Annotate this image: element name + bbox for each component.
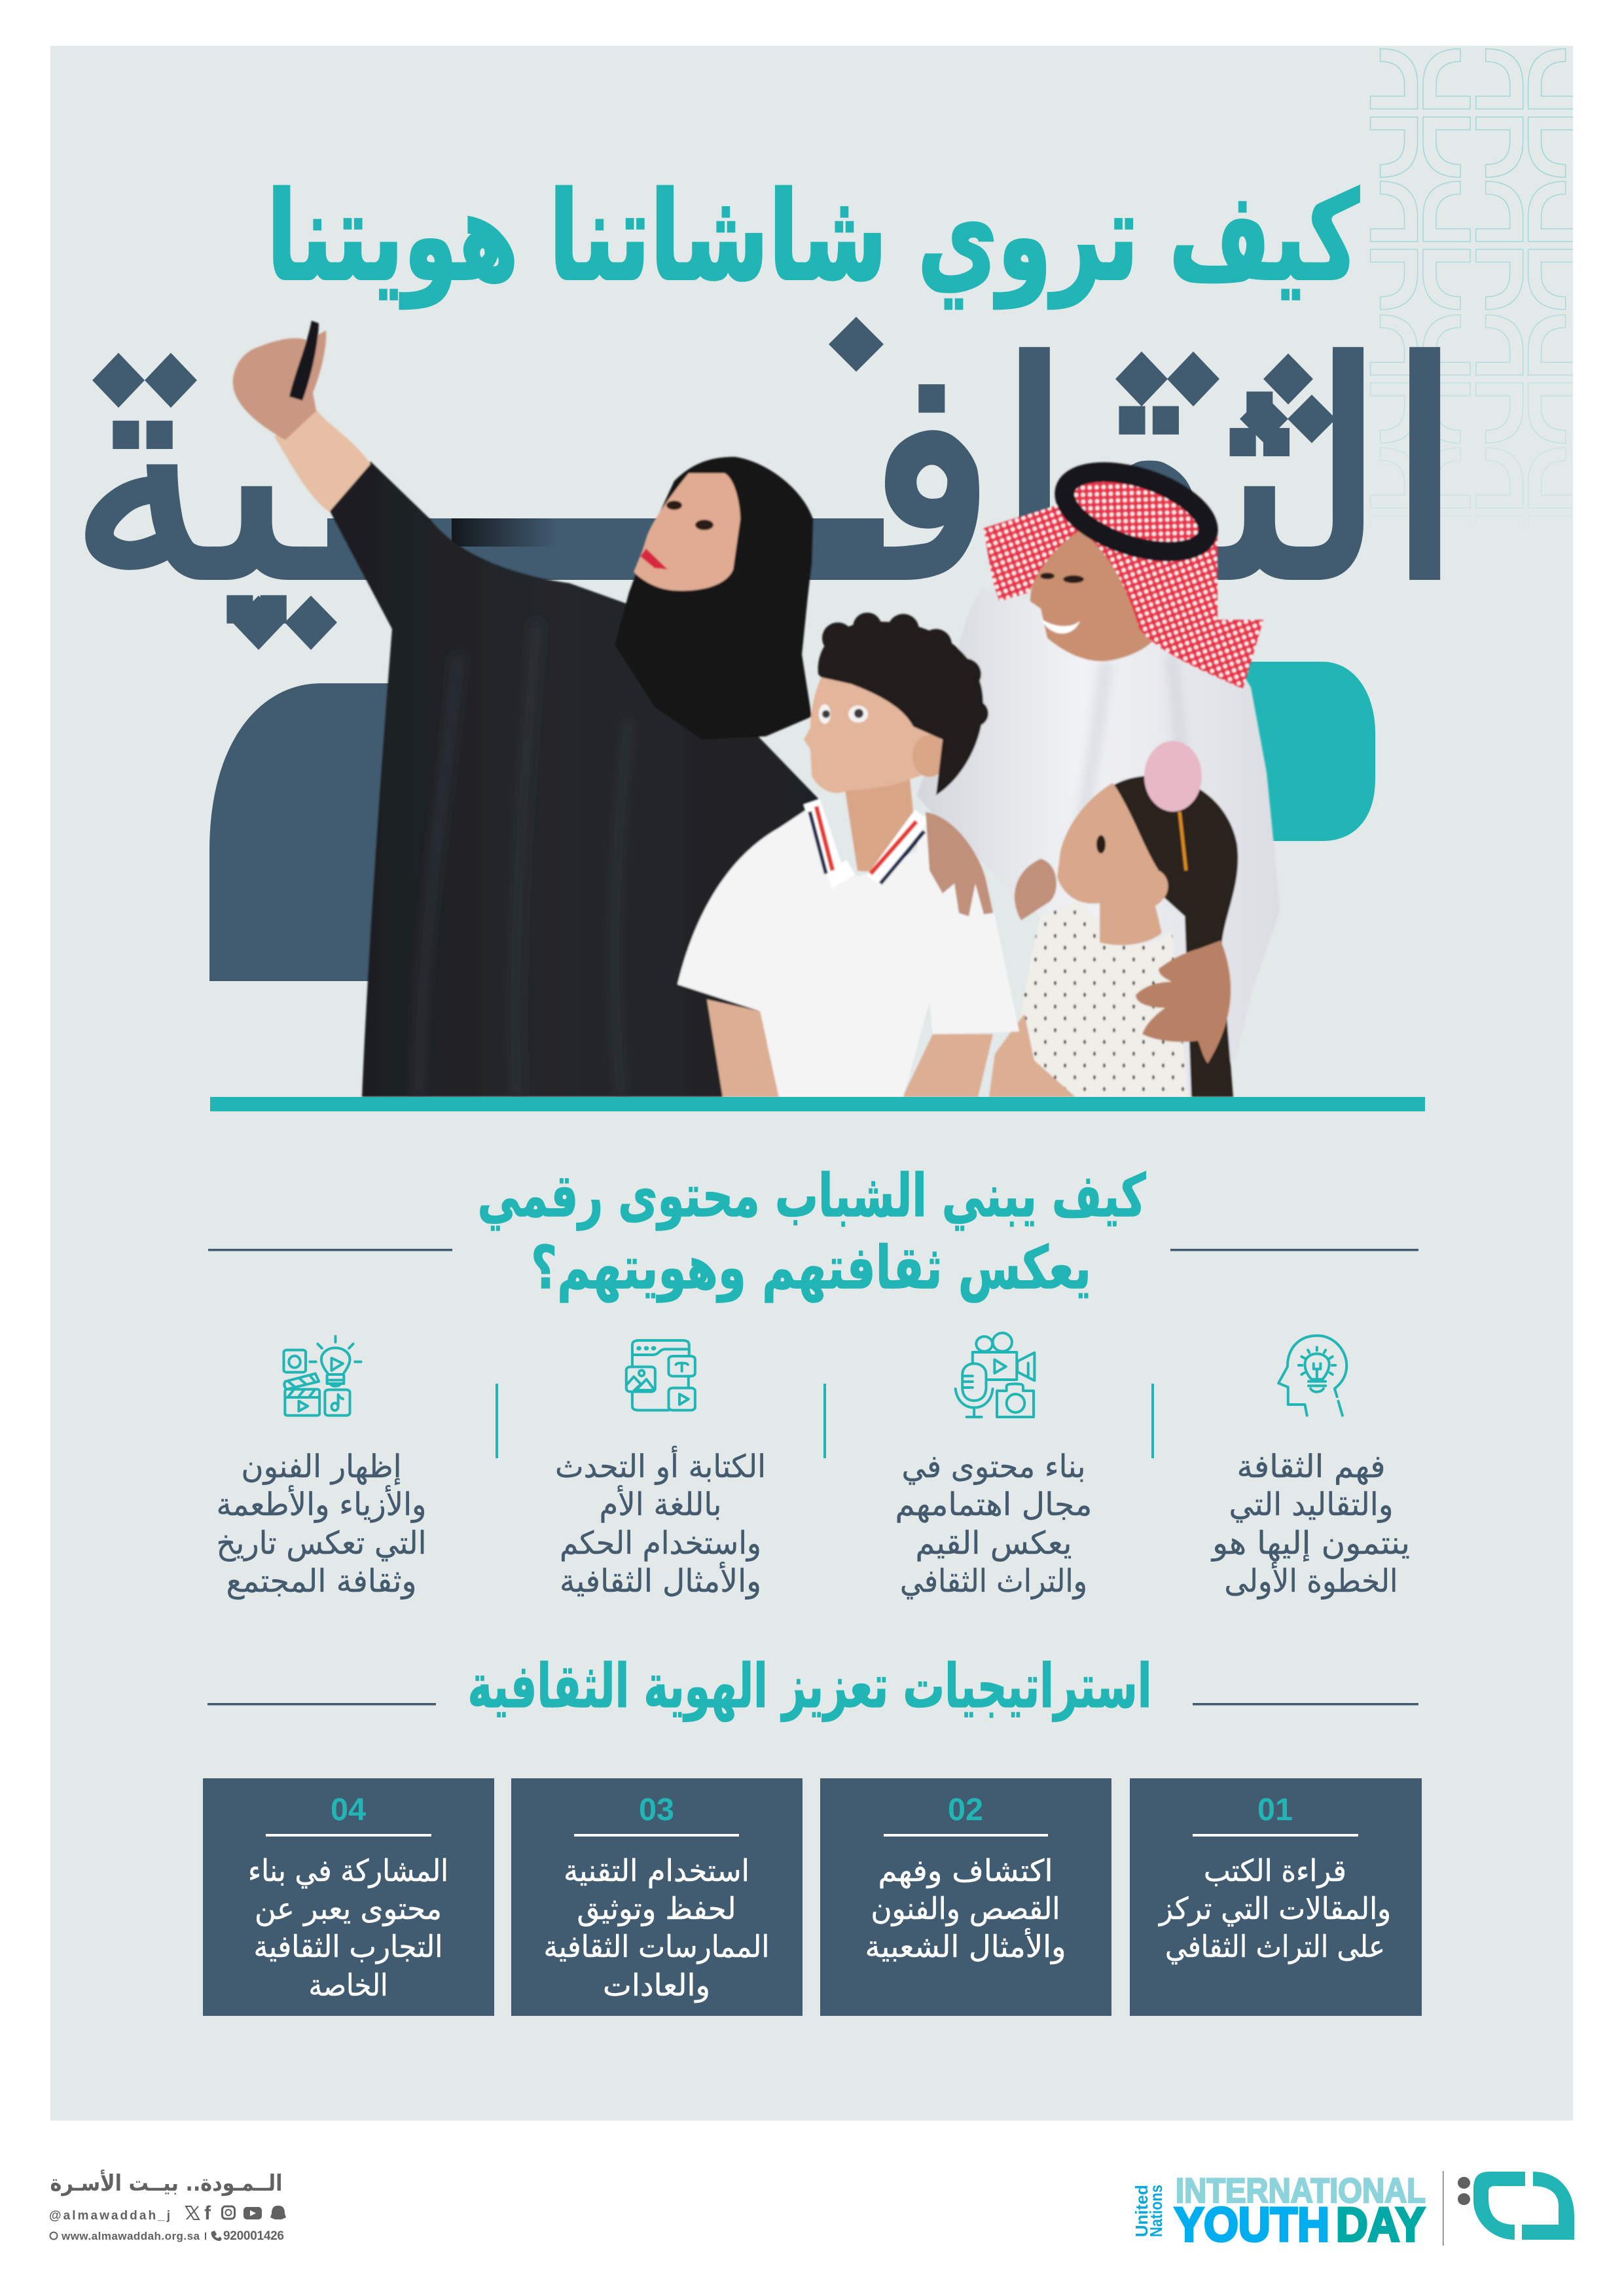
section heading: how youth build content: يعكس ثقافتهم وهويتهم؟ bbox=[531, 1234, 1091, 1303]
shape: dark blue rounded block bbox=[209, 683, 406, 981]
teal bar under photo bbox=[210, 1097, 1425, 1111]
text block: step 1: الخطوة الأولى bbox=[1224, 1561, 1398, 1600]
card 03: الممارسات الثقافية bbox=[543, 1929, 770, 1964]
logo: International Youth Day: YOUTH bbox=[1174, 2198, 1329, 2251]
card 04: محتوى يعبر عن bbox=[255, 1891, 442, 1927]
person: boy bbox=[677, 613, 1019, 1097]
text block: step 4: التي تعكس تاريخ bbox=[216, 1525, 427, 1562]
card 02: 02 bbox=[948, 1793, 983, 1827]
card 01: 01 bbox=[1257, 1793, 1293, 1827]
social icons bbox=[186, 2202, 286, 2224]
card 03: لحفظ وتوثيق bbox=[577, 1891, 736, 1927]
column dividers bbox=[496, 1384, 1154, 1458]
card 02: القصص والفنون bbox=[871, 1891, 1060, 1927]
text block: step 3: باللغة الأم bbox=[600, 1484, 721, 1523]
card 03: 03 bbox=[639, 1793, 674, 1827]
text block: step 3 bbox=[555, 1446, 766, 1600]
card 04: المشاركة في بناء bbox=[248, 1853, 448, 1889]
title: big word with diamond dots: الثقافـــــــية bbox=[69, 301, 1463, 647]
text block: step 4: إظهار الفنون bbox=[241, 1448, 402, 1485]
footer: organisation contact block bbox=[49, 2169, 286, 2243]
text block: step 1: والتقاليد التي bbox=[1229, 1486, 1393, 1523]
logo: International Youth Day bbox=[1132, 2172, 1426, 2251]
card 02: والأمثال الشعبية bbox=[865, 1928, 1066, 1965]
person: girl bbox=[989, 741, 1238, 1097]
card 03: استخدام التقنية bbox=[564, 1853, 749, 1888]
logo: International Youth Day: INTERNATIONAL bbox=[1176, 2172, 1426, 2210]
icon: head with light bulb bbox=[1278, 1336, 1346, 1416]
text block: step 1: ينتمون إليها هو bbox=[1211, 1525, 1410, 1562]
text block: step 2: مجال اهتمامهم bbox=[895, 1486, 1092, 1523]
icon: arts, film, music and idea bbox=[284, 1336, 361, 1416]
card 02 bbox=[820, 1778, 1111, 2016]
text block: step 1 bbox=[1211, 1448, 1410, 1600]
text block: step 2: والتراث الثقافي bbox=[900, 1563, 1087, 1600]
text block: step 3: واستخدام الحكم bbox=[560, 1525, 761, 1562]
card 03: والعادات bbox=[603, 1967, 710, 2003]
logo: International Youth Day: Nations bbox=[1146, 2185, 1166, 2237]
card 01: على التراث الثقافي bbox=[1165, 1929, 1385, 1965]
footer: organisation contact block: الــمـودة.. بيــت الأسـرة bbox=[50, 2169, 283, 2197]
text block: step 1: فهم الثقافة bbox=[1237, 1448, 1385, 1485]
text block: step 2: يعكس القيم bbox=[915, 1525, 1072, 1562]
footer: organisation contact block: www.almawaddah.org.sa bbox=[61, 2230, 200, 2242]
logo: Mawaddah mark bbox=[1458, 2172, 1574, 2240]
text block: step 2: بناء محتوى في bbox=[902, 1448, 1085, 1485]
text block: step 4 bbox=[216, 1448, 427, 1600]
icon: camera, video and microphone bbox=[956, 1333, 1034, 1417]
text block: step 4: والأزياء والأطعمة bbox=[216, 1484, 427, 1523]
decorative pattern: top right bbox=[1369, 48, 1573, 525]
text block: step 3: الكتابة أو التحدث bbox=[555, 1446, 766, 1485]
person: father bbox=[916, 456, 1280, 1097]
card 04 bbox=[203, 1778, 494, 2016]
section heading: how youth build content: كيف يبني الشباب محتوى رقمي bbox=[478, 1162, 1146, 1230]
text block: step 2 bbox=[895, 1448, 1092, 1600]
card 01 bbox=[1130, 1778, 1422, 2016]
footer: organisation contact block: @almawaddah_j bbox=[49, 2209, 170, 2223]
section heading: strategies: استراتيجيات تعزيز الهوية الثقافية bbox=[467, 1651, 1152, 1722]
card 01: قراءة الكتب bbox=[1204, 1853, 1346, 1889]
text block: step 4: وثقافة المجتمع bbox=[226, 1563, 416, 1600]
card 01: والمقالات التي تركز bbox=[1158, 1891, 1391, 1927]
social icons: f bbox=[204, 2202, 211, 2224]
card 03 bbox=[511, 1778, 803, 2016]
icon: content devices with image and text bbox=[626, 1340, 695, 1410]
photo: family taking a selfie bbox=[233, 321, 1280, 1097]
card 04: 04 bbox=[331, 1793, 366, 1827]
logo: International Youth Day: DAY bbox=[1336, 2198, 1425, 2251]
text block: step 3: والأمثال الثقافية bbox=[560, 1561, 761, 1600]
logo: International Youth Day: United bbox=[1132, 2185, 1151, 2237]
person: mother bbox=[233, 321, 818, 1097]
card 04: التجارب الثقافية bbox=[254, 1929, 442, 1964]
card 04: الخاصة bbox=[309, 1967, 388, 2003]
footer: organisation contact block: 920001426 bbox=[223, 2229, 284, 2243]
shape: teal rounded block bbox=[1244, 662, 1375, 841]
section heading: how youth build content bbox=[478, 1162, 1146, 1303]
card 02: اكتشاف وفهم bbox=[878, 1853, 1053, 1889]
